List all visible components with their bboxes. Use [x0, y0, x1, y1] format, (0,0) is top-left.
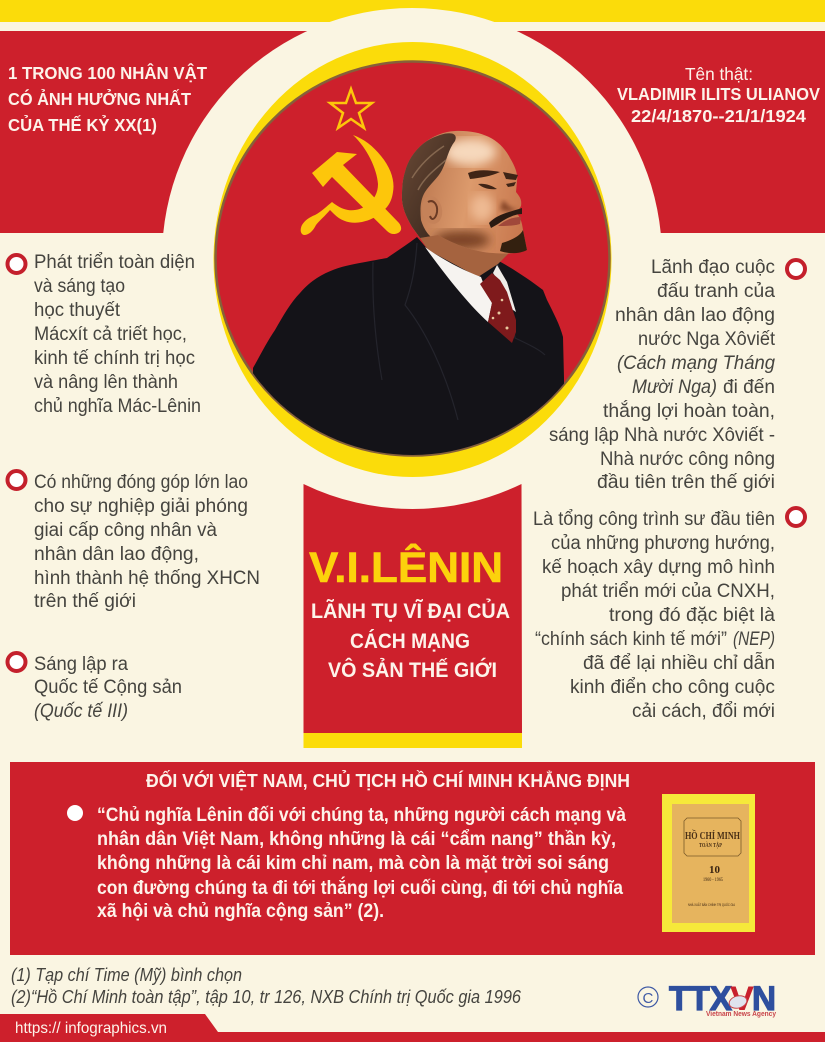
right text block 2: đã để lại nhiều chỉ dẫn [583, 652, 775, 674]
right text block 1: Mười Nga) [632, 377, 717, 398]
shirt collar [425, 247, 492, 322]
footnotes: (2)“Hồ Chí Minh toàn tập”, tập 10, tr 126, NXB Chính trị Quốc gia 1996 [11, 987, 522, 1007]
right text block 1: thắng lợi hoàn toàn, [603, 400, 775, 422]
icon: hammer and sickle [301, 135, 401, 235]
right text block 2: “chính sách kinh tế mới” [535, 629, 727, 650]
left text block 2: hình thành hệ thống XHCN [34, 568, 260, 589]
book volume: 10 [709, 864, 720, 876]
right text block 2: cải cách, đổi mới [632, 701, 775, 722]
quote text: xã hội và chủ nghĩa cộng sản” (2). [97, 901, 384, 922]
left text block 3 [34, 654, 182, 722]
brow and eye [468, 170, 518, 189]
panel: Ho Chi Minh quote [10, 762, 815, 955]
top right red panel [412, 31, 825, 233]
quote heading: ĐỐI VỚI VIỆT NAM, CHỦ TỊCH HỒ CHÍ MINH KHẲNG ĐỊNH [146, 770, 630, 791]
copyright symbol: C [642, 990, 654, 1007]
agency wordmark: V [730, 980, 754, 1018]
top left heading [8, 62, 207, 135]
goatee [500, 230, 527, 253]
book yellow frame [662, 794, 755, 932]
right text block 1: (Cách mạng Tháng [617, 353, 775, 374]
right text block 1: Nhà nước công nông [600, 449, 775, 470]
jaw shadow [434, 230, 490, 250]
Lenin figure [253, 125, 564, 470]
right text block 1: đi đến [723, 377, 775, 398]
icon: left bullet 1 [8, 255, 26, 273]
quote text [97, 805, 626, 922]
top right real name: 22/4/1870--21/1/1924 [631, 106, 806, 126]
icon: right bullet 2 [787, 508, 805, 526]
quote text: “Chủ nghĩa Lênin đối với chúng ta, những người cách mạng và [97, 805, 626, 826]
right text block 2: của những phương hướng, [551, 533, 775, 554]
right text block 2: (NEP) [733, 629, 775, 650]
central red banner [304, 484, 522, 748]
book title: HỒ CHÍ MINH [685, 829, 740, 842]
book label box [684, 818, 741, 856]
icon: right bullet 1 [787, 260, 805, 278]
agency tagline: Vietnam News Agency [706, 1009, 777, 1018]
left text block 3: Quốc tế Cộng sản [34, 677, 182, 698]
banner subtitle: LÃNH TỤ VĨ ĐẠI CỦA [311, 598, 510, 623]
cream ring behind portrait [162, 8, 662, 508]
footer url: https:// infographics.vn [15, 1020, 167, 1037]
banner subtitle: CÁCH MẠNG [350, 628, 470, 653]
moustache [489, 208, 522, 228]
top yellow band [0, 0, 825, 22]
right text block 2 [533, 509, 775, 722]
top left heading: CỦA THẾ KỶ XX(1) [8, 114, 157, 135]
right text block 1: Lãnh đạo cuộc [651, 257, 775, 278]
left text block 1: và sáng tạo [34, 276, 125, 297]
head base [402, 130, 527, 254]
agency wordmark: N [752, 980, 776, 1018]
left text block 1: học thuyết [34, 300, 121, 321]
left text block 1: Phát triển toàn diện [34, 252, 195, 273]
logo: TTXVN [638, 980, 777, 1018]
left text block 1: kinh tế chính trị học [34, 348, 195, 369]
left text block 1: và nâng lên thành [34, 372, 178, 393]
footer bar [0, 1014, 825, 1042]
shirt collar right [493, 265, 516, 312]
banner subtitle [311, 598, 510, 682]
right text block 2: trong đó đặc biệt là [609, 605, 775, 626]
banner ribbon [304, 484, 522, 733]
right text block 2: phát triển mới của CNXH, [561, 581, 775, 602]
right text block 1: đầu tiên trên thế giới [597, 472, 775, 493]
right text block 2: Là tổng công trình sư đầu tiên [533, 509, 775, 530]
icon: star [330, 89, 372, 128]
right text block 2: kế hoạch xây dựng mô hình [542, 557, 775, 578]
neck [420, 235, 508, 276]
icon: left bullet 3 [8, 653, 26, 671]
footnotes: (1) Tạp chí Time (Mỹ) bình chọn [11, 965, 242, 985]
coat lapel folds [373, 243, 545, 420]
ear [428, 200, 442, 222]
top right real name: Tên thật: [685, 64, 753, 84]
panel background [10, 762, 815, 955]
left text block 1: Mácxít cả triết học, [34, 324, 187, 345]
top left heading: CÓ ẢNH HƯỞNG NHẤT [8, 88, 191, 109]
left text block 2: Có những đóng góp lớn lao [34, 472, 248, 493]
right text block 1: sáng lập Nhà nước Xôviết - [549, 425, 775, 446]
right text block 1: đấu tranh của [657, 281, 775, 302]
left text block 2: giai cấp công nhân và [34, 520, 217, 541]
quote text: không những là cái kim chỉ nam, mà còn là mặt trời soi sáng [97, 853, 609, 874]
portrait medallion [216, 62, 610, 470]
banner yellow base [304, 733, 522, 748]
agency wordmark [669, 980, 776, 1018]
footnotes [11, 965, 522, 1007]
book cover [662, 794, 755, 932]
top left red panel [0, 31, 412, 233]
right text block 1 [549, 257, 776, 493]
book face [672, 804, 749, 923]
top right real name [617, 64, 820, 126]
footer red strip and tab [0, 1014, 825, 1042]
left text block 2: trên thế giới [34, 591, 136, 612]
quote text: nhân dân Việt Nam, không những là cái “cẩm nang” thần kỳ, [97, 829, 616, 850]
necktie [480, 273, 516, 343]
book years: 1960 - 1965 [703, 878, 723, 883]
forehead highlight [444, 139, 496, 165]
medallion rim and red disc [216, 62, 610, 456]
head [402, 130, 527, 254]
agency wordmark: TTX [669, 980, 732, 1018]
left text block 3: Sáng lập ra [34, 654, 128, 675]
banner title: V.I.LÊNIN [309, 543, 503, 592]
globe emblem [728, 994, 748, 1010]
left text block 1 [34, 252, 201, 417]
hair streaks [412, 146, 446, 190]
right text block 2: kinh điển cho công cuộc [570, 677, 775, 698]
left text block 2 [34, 472, 260, 612]
coat [253, 237, 564, 470]
left text block 1: chủ nghĩa Mác-Lênin [34, 396, 201, 417]
icon: white bullet [67, 805, 83, 821]
banner subtitle: VÔ SẢN THẾ GIỚI [328, 657, 497, 682]
left text block 2: nhân dân lao động, [34, 544, 199, 565]
right text block 1: nhân dân lao động [615, 305, 775, 326]
lips [498, 217, 521, 226]
icon: left bullet 2 [8, 471, 26, 489]
left text block 2: cho sự nghiệp giải phóng [34, 496, 248, 517]
hair [402, 133, 456, 240]
book publisher: NHÀ XUẤT BẢN CHÍNH TRỊ QUỐC GIA [688, 902, 735, 907]
top left heading: 1 TRONG 100 NHÂN VẬT [8, 62, 207, 83]
left text block 3: (Quốc tế III) [34, 701, 128, 722]
book subtitle: TOÀN TẬP [699, 841, 722, 849]
yellow halo [214, 42, 612, 477]
nose shadow [500, 200, 518, 212]
cheek highlight [470, 194, 494, 222]
right text block 1: nước Nga Xôviết [638, 329, 776, 350]
quote text: con đường chúng ta đi tới thắng lợi cuối cùng, đi tới chủ nghĩa [97, 877, 623, 899]
